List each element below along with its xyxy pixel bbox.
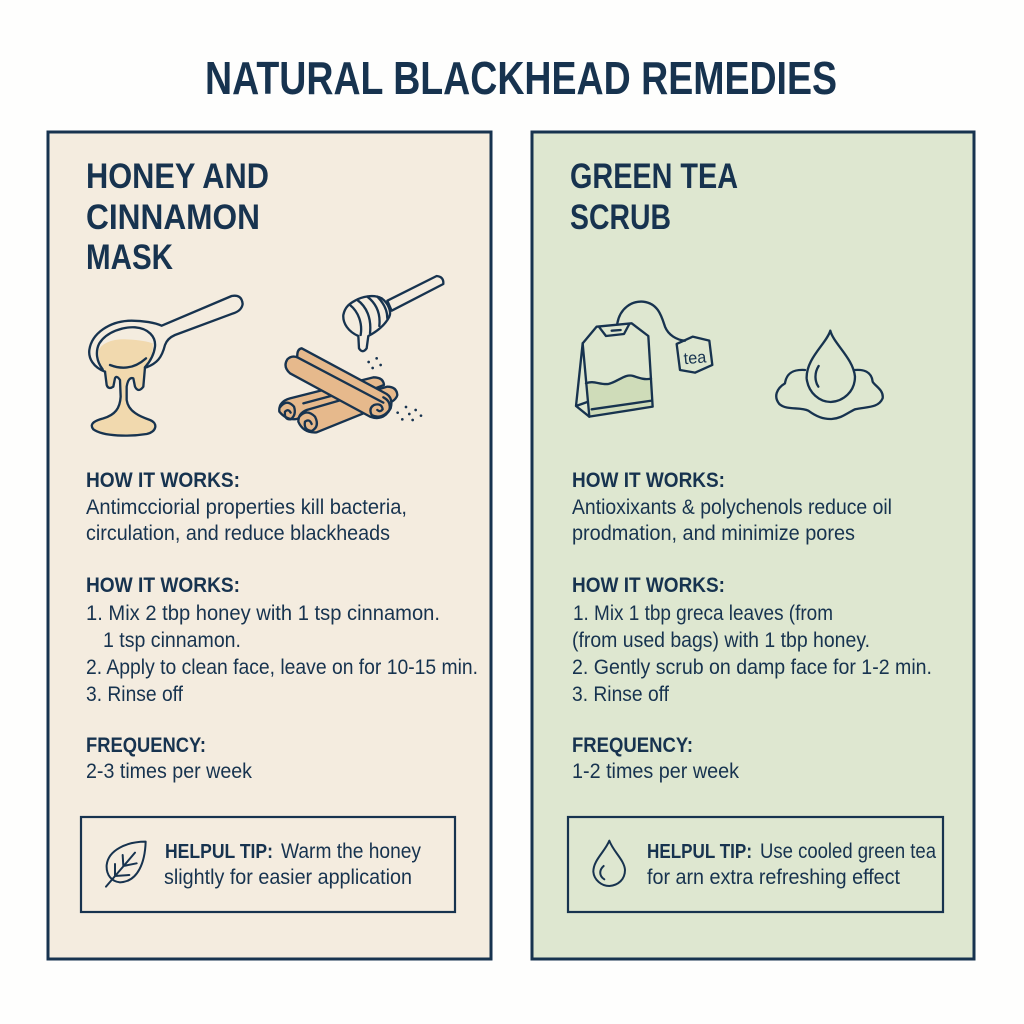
icon: cinnamon powder specks <box>367 357 422 421</box>
text block: steps: 3. Rinse off <box>86 683 183 706</box>
text block: how it works <box>86 469 407 545</box>
text block: frequency: FREQUENCY: <box>86 734 206 757</box>
icon: honey spoon <box>89 296 243 436</box>
title: NATURAL BLACKHEAD REMEDIES <box>205 52 837 104</box>
text block: steps: 1. Mix 2 tbp honey with 1 tsp cinnamon. <box>86 602 440 625</box>
icon: cinnamon sticks <box>279 348 422 432</box>
icon: tea bag <box>576 302 712 417</box>
icon: tea bag: tea <box>683 347 708 368</box>
text block: frequency <box>86 734 252 783</box>
callout: honey tip: Warm the honey <box>281 840 421 863</box>
text block: steps: 2. Gently scrub on damp face for 1-2 min. <box>572 656 932 679</box>
text block: steps: 3. Rinse off <box>572 683 669 706</box>
text block: frequency: 2-3 times per week <box>86 760 252 783</box>
panel: honey and cinnamon mask <box>48 132 491 959</box>
text block: frequency: 1-2 times per week <box>572 760 739 783</box>
text block: how it works: prodmation, and minimize pores <box>572 522 855 545</box>
callout: honey tip <box>81 817 455 912</box>
text block: how it works: HOW IT WORKS: <box>86 469 240 492</box>
heading: green tea scrub: SCRUB <box>570 198 671 237</box>
text block: steps: (from used bags) with 1 tbp honey. <box>572 629 870 652</box>
icon: water drop <box>593 841 625 886</box>
text block: frequency <box>572 734 739 783</box>
text block: how it works: HOW IT WORKS: <box>572 469 725 492</box>
callout: honey tip: HELPUL TIP: <box>165 841 273 863</box>
text block: steps: HOW IT WORKS: <box>572 574 725 597</box>
text block: steps: HOW IT WORKS: <box>86 574 240 597</box>
text block: steps <box>86 574 478 706</box>
text block: how it works: Antioxixants & polychenols reduce oil <box>572 496 892 519</box>
icon: water drop on puddle <box>776 331 883 419</box>
text block: steps: 1. Mix 1 tbp greca leaves (from <box>573 602 833 625</box>
heading: honey and cinnamon mask: HONEY AND <box>86 157 269 196</box>
text block: steps <box>572 574 932 706</box>
text block: steps: 2. Apply to clean face, leave on for 10-15 min. <box>86 656 478 679</box>
icon: honey dipper <box>343 276 443 351</box>
text block: frequency: FREQUENCY: <box>572 734 693 757</box>
callout: honey tip: slightly for easier application <box>164 866 412 889</box>
callout: green tea tip <box>568 817 943 912</box>
heading: honey and cinnamon mask: CINNAMON <box>86 198 260 237</box>
text block: how it works: Antimcciorial properties kill bacteria, <box>86 496 407 519</box>
text block: steps: 1 tsp cinnamon. <box>103 629 241 652</box>
panel: green tea scrub <box>532 132 974 959</box>
callout: green tea tip: HELPUL TIP: <box>647 841 752 863</box>
text block: how it works <box>572 469 892 545</box>
text block: how it works: circulation, and reduce blackheads <box>86 522 390 545</box>
heading: green tea scrub: GREEN TEA <box>570 157 738 196</box>
icon: leaf <box>106 842 146 887</box>
callout: green tea tip: Use cooled green tea <box>760 840 936 863</box>
callout: green tea tip: for arn extra refreshing effect <box>647 866 900 889</box>
heading: green tea scrub <box>570 157 738 237</box>
heading: honey and cinnamon mask <box>86 157 269 277</box>
heading: honey and cinnamon mask: MASK <box>86 238 173 277</box>
